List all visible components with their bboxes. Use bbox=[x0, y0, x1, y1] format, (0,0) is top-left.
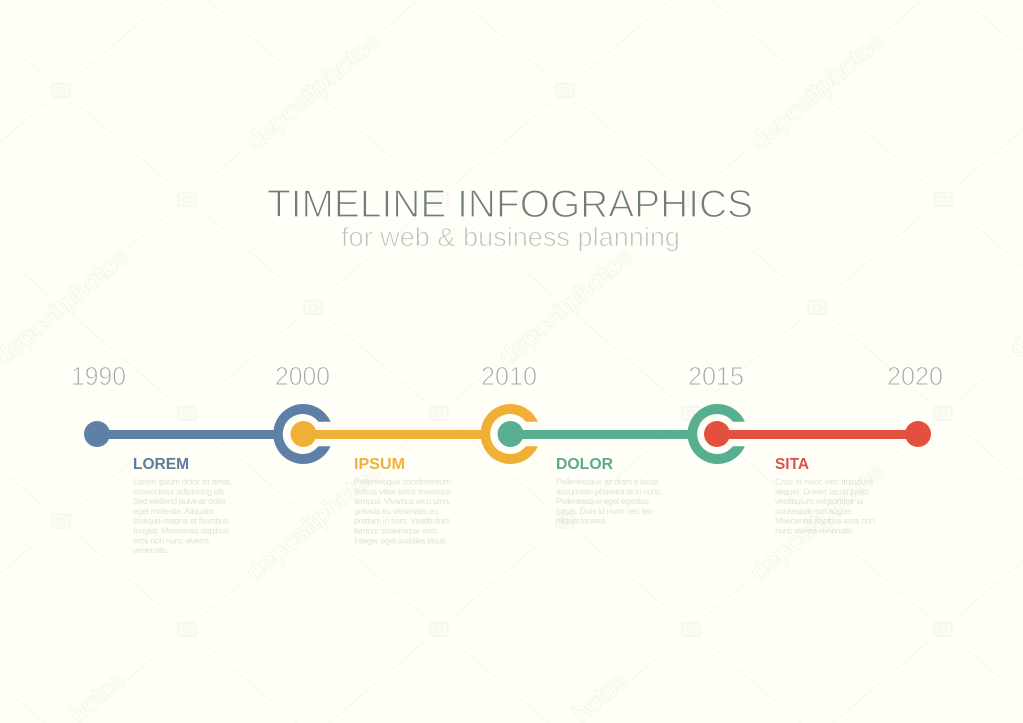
year labels: 1990 bbox=[71, 361, 126, 391]
text block: lorem: consectetur adipiscing elit. bbox=[133, 486, 226, 496]
text block: dolor: aliquet laoreet. bbox=[556, 516, 607, 526]
text block: dolor: DOLOR bbox=[556, 456, 613, 473]
text block: ipsum: tempus. Vivamus arcu urna, bbox=[354, 496, 451, 506]
text block: lorem: feugiat. Maecenas dapibus bbox=[133, 526, 230, 536]
segment 1990-2000: blue bbox=[84, 404, 331, 464]
text block: dolor: Pellentesque ac diam a lacus bbox=[556, 476, 660, 486]
year labels: 2010 bbox=[481, 361, 537, 391]
text block: ipsum: tempor scelerisque sem. bbox=[354, 526, 439, 536]
text block: sita: Maecenas dapibus eros non bbox=[775, 516, 875, 526]
segment 2015-2020: red bbox=[704, 421, 931, 447]
segment 2010-2015: green bbox=[498, 404, 745, 464]
watermark: depositphotos text repeated: depositphotos bbox=[746, 458, 889, 587]
text block: ipsum: pretium in sem. Vestibulum bbox=[354, 516, 450, 526]
text block: lorem: Lorem ipsum dolor sit amet, bbox=[133, 476, 232, 486]
text block: sita: SITA bbox=[775, 456, 809, 473]
segment 2000-2010: yellow bbox=[290, 404, 538, 464]
text block: lorem: LOREM bbox=[133, 456, 189, 473]
text block: ipsum bbox=[354, 456, 452, 545]
text block: ipsum: finibus vitae tortor maximus bbox=[354, 486, 452, 496]
text block: ipsum: IPSUM bbox=[354, 456, 405, 473]
text block: ipsum: gravida eu venenatis eu, bbox=[354, 506, 440, 516]
text block: dolor: turpis. Duis id nunc nec leo bbox=[556, 506, 653, 516]
text block: lorem: tristique magna et faucibus bbox=[133, 516, 230, 526]
watermark: depositphotos text repeated: depositphotos bbox=[746, 27, 889, 156]
year labels: 2020 bbox=[887, 361, 943, 391]
text block: sita: aliquet. Donec lacus justo, bbox=[775, 486, 870, 496]
text block: sita: Cras id nunc nec tincidunt bbox=[775, 476, 874, 486]
text block: sita: consequat non augue. bbox=[775, 506, 853, 516]
text block: lorem bbox=[133, 456, 232, 555]
watermark: depositphotos text repeated: depositphotos bbox=[242, 27, 385, 156]
text block: ipsum: Pellentesque condimentum bbox=[354, 476, 451, 486]
text block: lorem: venenatis. bbox=[133, 545, 169, 555]
timeline chart bbox=[84, 404, 931, 464]
watermark: depositphotos text repeated: depositphotos bbox=[494, 243, 637, 372]
year labels: 2000 bbox=[275, 361, 330, 391]
text block: lorem: Sed eleifend pulvinar dolor bbox=[133, 496, 226, 506]
watermark: camera icons bbox=[41, 70, 963, 649]
text block: dolor: Pellentesque eget egestas bbox=[556, 496, 650, 506]
subtitle: for web & business planning bbox=[341, 224, 680, 252]
year labels bbox=[71, 361, 943, 391]
text block: sita: vestibulum vel porttitor id, bbox=[775, 496, 865, 506]
text block: ipsum: Integer eget sodales lacus. bbox=[354, 535, 448, 545]
title: TIMELINE INFOGRAPHICS bbox=[267, 183, 753, 226]
year labels: 2015 bbox=[688, 361, 744, 391]
text block: dolor bbox=[556, 456, 663, 526]
text block: sita: nunc viverra venenatis. bbox=[775, 526, 854, 536]
text block: lorem: eget molestie. Aliquam bbox=[133, 506, 214, 516]
text block: lorem: eros non nunc viverra bbox=[133, 535, 209, 545]
watermark: depositphotos text repeated: depositphotos bbox=[242, 458, 385, 587]
text block: sita bbox=[775, 456, 875, 536]
text block: dolor: accumsan pharetra at in nunc. bbox=[556, 486, 663, 496]
